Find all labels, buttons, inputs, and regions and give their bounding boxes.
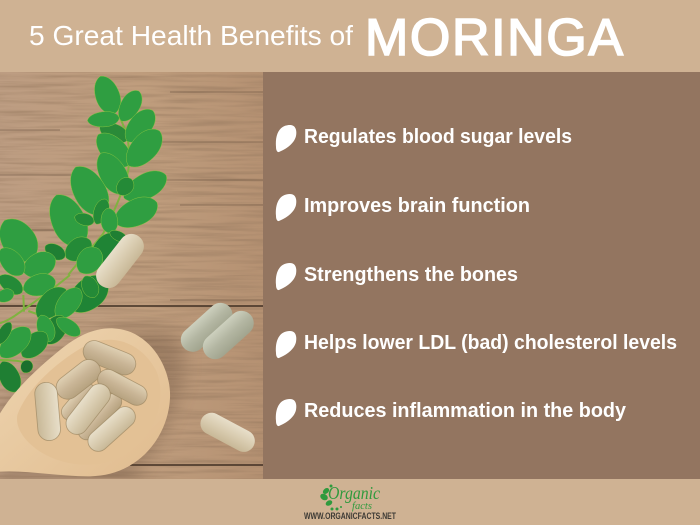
moringa sprig: [0, 72, 172, 396]
benefit 3: Strengthens the bones: [304, 263, 518, 286]
title: [29, 9, 623, 67]
footer band: [0, 479, 700, 525]
logo: Organic Facts: Organic: [328, 483, 380, 503]
benefit 2: Improves brain function: [304, 194, 530, 217]
benefit 5: Reduces inflammation in the body: [304, 399, 627, 422]
logo: Organic Facts: facts: [352, 501, 372, 512]
capsule: resting on leaves: [91, 229, 149, 293]
title: 5 Great Health Benefits of: [29, 20, 353, 51]
capsules on the table: [176, 298, 259, 456]
panel: benefits: [263, 72, 700, 479]
title: MORINGA: [365, 9, 623, 67]
benefit 1: Regulates blood sugar levels: [304, 125, 572, 148]
header band: [0, 0, 700, 72]
logo: Organic Facts: [304, 483, 396, 521]
benefit 4: Helps lower LDL (bad) cholesterol levels: [304, 331, 677, 354]
icon: logo leaves: [319, 484, 342, 510]
photo: moringa leaves and capsules on wood: [0, 72, 263, 480]
logo: Organic Facts: WWW.ORGANICFACTS.NET: [304, 511, 396, 521]
wooden spoon with capsules: [0, 328, 170, 476]
spoon shadow: [0, 330, 184, 480]
